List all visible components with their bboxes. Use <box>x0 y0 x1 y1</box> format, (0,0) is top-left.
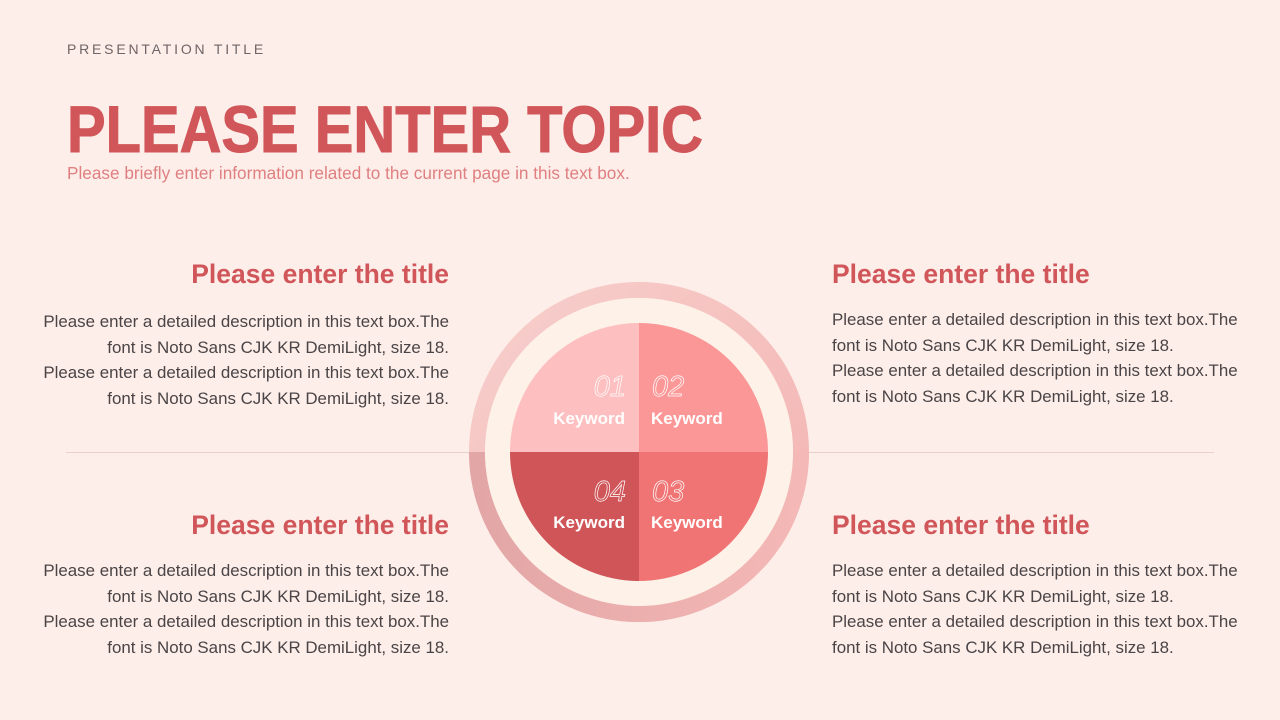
segment 03: 03 <box>652 476 684 508</box>
panel: top left: Please enter a detailed description in this text box.The <box>43 312 449 331</box>
segment 04 <box>510 452 639 581</box>
panel: bottom left: font is Noto Sans CJK KR DemiLight, size 18. <box>107 586 449 606</box>
segment 02 <box>639 323 768 452</box>
panel: bottom right: Please enter a detailed description in this text box.The <box>832 561 1238 580</box>
segment 02: 02 <box>652 371 684 403</box>
subtitle: Please briefly enter information related to the current page in this text box. <box>67 163 630 183</box>
panel: top right: Please enter the title <box>832 259 1090 289</box>
segment 04: Keyword <box>553 513 625 532</box>
panel: top left: Please enter the title <box>191 259 449 289</box>
panel: bottom left: Please enter the title <box>191 510 449 540</box>
segment 03: Keyword <box>651 513 723 532</box>
segment 01 <box>510 323 639 452</box>
panel: bottom right: font is Noto Sans CJK KR DemiLight, size 18. <box>832 586 1174 606</box>
panel: bottom right: Please enter a detailed description in this text box.The <box>832 612 1238 631</box>
chart: circular keyword diagram <box>469 282 809 622</box>
segment 04: 04 <box>594 476 626 508</box>
panel: top left: Please enter a detailed description in this text box.The <box>43 363 449 382</box>
panel: bottom right: font is Noto Sans CJK KR DemiLight, size 18. <box>832 638 1174 656</box>
segment 02: Keyword <box>651 409 723 428</box>
panel: bottom right: Please enter the title <box>832 510 1090 540</box>
panel: bottom left: Please enter a detailed description in this text box.The <box>43 561 449 580</box>
panel: top right <box>832 259 1238 406</box>
panel: bottom left <box>43 510 449 656</box>
segment 03 <box>639 452 768 581</box>
panel: top left: font is Noto Sans CJK KR DemiLight, size 18. <box>107 388 449 408</box>
presentation title: PRESENTATION TITLE <box>67 41 266 57</box>
panel: top left <box>43 259 449 408</box>
panel: bottom left: Please enter a detailed description in this text box.The <box>43 612 449 631</box>
segment 01: 01 <box>594 371 626 403</box>
panel: top left: font is Noto Sans CJK KR DemiLight, size 18. <box>107 338 449 356</box>
panel: top right: Please enter a detailed description in this text box.The <box>832 361 1238 380</box>
panel: top right: Please enter a detailed description in this text box.The <box>832 310 1238 329</box>
panel: top right: font is Noto Sans CJK KR DemiLight, size 18. <box>832 386 1174 406</box>
segment 01: Keyword <box>553 409 625 428</box>
panel: bottom left: font is Noto Sans CJK KR DemiLight, size 18. <box>107 638 449 656</box>
panel: top right: font is Noto Sans CJK KR DemiLight, size 18. <box>832 336 1174 354</box>
panel: bottom right <box>832 510 1238 656</box>
